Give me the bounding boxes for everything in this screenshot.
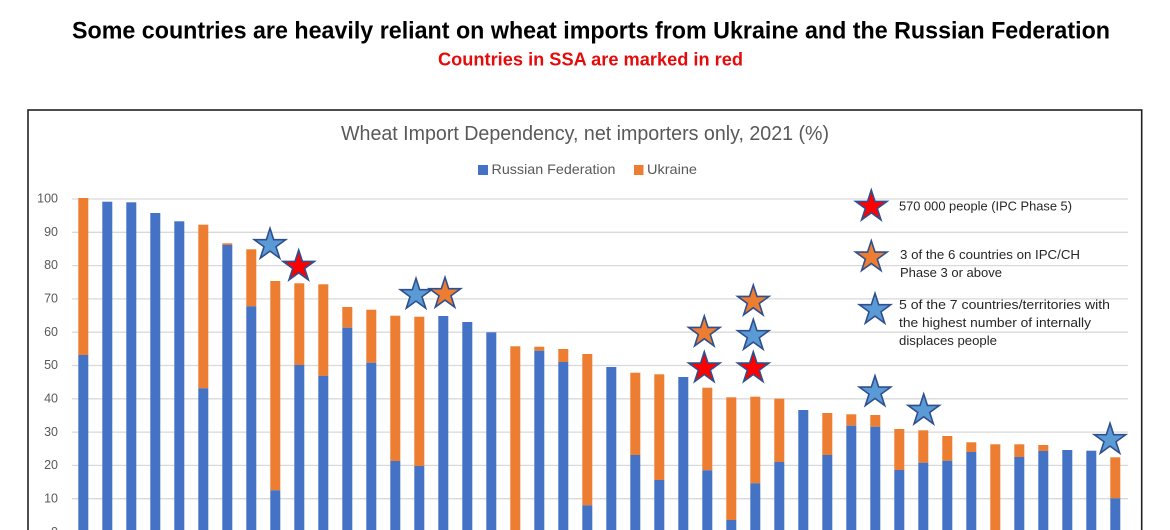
icon: blue star above bar 44 [1094,423,1126,453]
bar 33 [846,414,856,530]
bar 11 [318,284,328,530]
callout: IPC Phase 5 key [856,190,1072,220]
icon: orange star above bar 27 [689,316,720,346]
bar 41 [1038,445,1048,530]
bar 23 [606,367,616,530]
callout: IPC/CH Phase 3 key [856,241,1080,280]
bar 22 [582,354,592,530]
bar 16 [438,316,448,530]
bar 13 [366,310,376,530]
bar 39 [990,444,1000,530]
bar 43 [1086,451,1096,530]
bar 5 [174,221,184,530]
bar 40 [1014,444,1024,530]
bar 12 [342,307,352,530]
icon: blue star above bar 15 [400,278,432,308]
subtitle: Countries in SSA are marked in red [438,50,743,70]
bar 29 [750,397,760,530]
bar 15 [414,317,424,530]
icon: blue star above bar 34 [859,376,891,406]
callout: internally displaced people key: 5 of the 7 countries/territories with [899,297,1110,312]
chart legend [478,161,697,177]
bar 35 [894,429,904,530]
bar 9 [270,281,280,530]
callout: internally displaced people key: displaces people [899,333,997,348]
bar 36 [918,430,928,530]
bar 10 [294,283,304,530]
chart title: Wheat Import Dependency, net importers only, 2021 (%) [341,123,829,145]
y axis labels: 100 [37,192,58,206]
icon: blue star above bar 9 [254,228,286,258]
y axis labels: 80 [44,258,58,272]
y axis labels [37,192,58,530]
bar 2 [102,202,112,530]
icon: red star above bar 10 [283,250,314,280]
y axis labels: 90 [44,225,58,239]
chart legend: Russian Federation [492,161,616,177]
callout: IPC Phase 5 key: 570 000 people (IPC Phase 5) [899,198,1072,214]
bar 3 [126,202,136,530]
callout: internally displaced people key [859,293,1110,348]
stacked bar chart [78,198,1120,530]
icon: orange star above bar 29 [738,285,769,315]
y axis labels: 50 [44,358,58,372]
bar 6 [198,225,208,530]
y axis labels: 70 [44,292,58,306]
y axis labels: 20 [44,458,58,472]
bar 30 [774,399,784,530]
bar 1 [78,198,88,530]
bar 44 [1110,457,1120,530]
icon: red star above bar 27 [689,352,720,382]
bar 4 [150,213,160,530]
bar 32 [822,413,832,530]
icon: red star above bar 29 [738,352,769,382]
bar 20 [534,347,544,530]
title: Some countries are heavily reliant on wheat imports from Ukraine and the Russian Federation [72,18,1110,44]
y axis labels: 10 [44,492,58,506]
bar 18 [486,332,496,530]
bar 31 [798,410,808,530]
bar 38 [966,442,976,530]
bar 28 [726,397,736,530]
bar 7 [222,243,232,530]
bar 37 [942,436,952,530]
bar 26 [678,377,688,530]
bar 42 [1062,450,1072,530]
callout: IPC/CH Phase 3 key: Phase 3 or above [900,265,1002,280]
icon: blue star above bar 36 [908,394,939,424]
icon: blue star above bar 29 [738,319,769,349]
bar 21 [558,349,568,530]
chart legend: Ukraine [647,161,697,177]
y axis labels: 40 [44,392,58,406]
bar 24 [630,373,640,530]
bar 17 [462,322,472,530]
bar 25 [654,374,664,530]
callout: IPC/CH Phase 3 key: 3 of the 6 countries on IPC/CH [900,247,1080,262]
y axis labels: 30 [44,425,58,439]
bar 34 [870,415,880,530]
bar 27 [702,388,712,530]
bar 14 [390,316,400,530]
icon: orange star above bar 16 [429,277,461,307]
y axis labels: 60 [44,325,58,339]
callout: internally displaced people key: the highest number of internally [899,315,1092,330]
bar 8 [246,249,256,530]
panel: chart frame [28,110,1142,530]
bar 19 [510,346,520,530]
